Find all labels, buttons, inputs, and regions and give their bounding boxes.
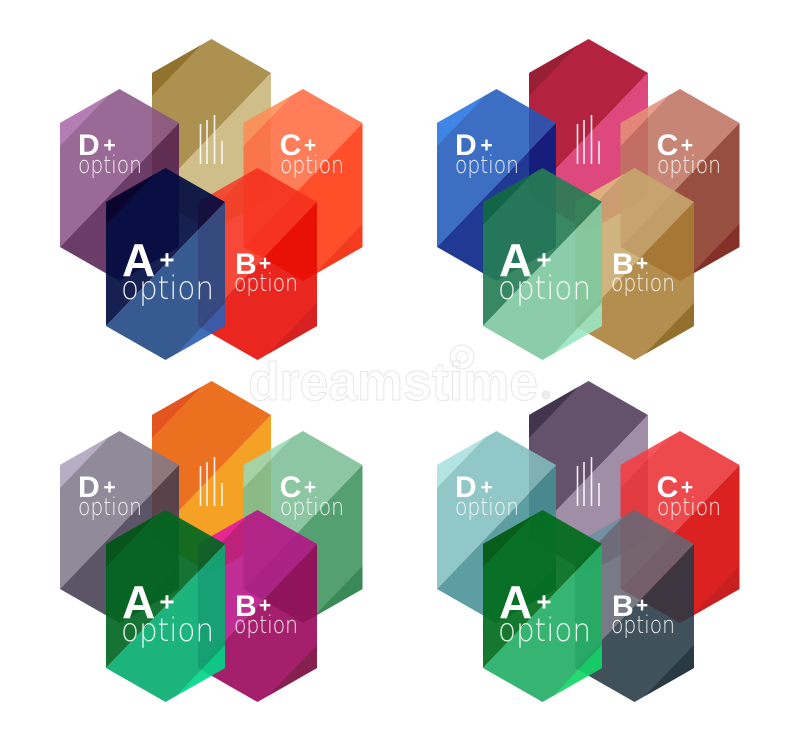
hexagon: top icon tile, tan <box>152 39 271 231</box>
label: A+ option: option <box>498 611 591 649</box>
label: B+ option: + <box>259 252 271 275</box>
hexagon: option B, slate <box>575 510 694 702</box>
label: C+ option: option <box>657 493 721 521</box>
label: D+ option: D <box>78 129 100 162</box>
label: D+ option: D <box>455 471 477 504</box>
label: C+ option: + <box>681 476 693 499</box>
label: B+ option: B <box>612 248 634 281</box>
label: D+ option: D <box>78 471 100 504</box>
label: A+ option: A <box>499 234 532 286</box>
label: D+ option: + <box>103 476 116 499</box>
hexagon: option C, coral <box>244 89 362 281</box>
label: B+ option <box>234 590 298 639</box>
label: A+ option: option <box>121 269 214 307</box>
label: C+ option: C <box>280 471 301 504</box>
panel: plum teal red hexagon set <box>437 381 740 702</box>
label: C+ option: C <box>280 129 301 162</box>
label: A+ option: + <box>536 587 552 617</box>
icon: bars <box>200 457 222 506</box>
label: B+ option <box>611 248 675 297</box>
hexagon: option D, pale teal <box>437 431 556 623</box>
label: C+ option <box>657 471 721 521</box>
label: C+ option: + <box>304 476 316 499</box>
label: B+ option: option <box>611 611 675 639</box>
panel: orange magenta green hexagon set <box>60 381 362 702</box>
label: A+ option: option <box>121 611 214 649</box>
label: A+ option: + <box>536 245 552 275</box>
hexagon: option D, grey violet <box>60 431 179 623</box>
label: A+ option: A <box>122 234 155 286</box>
label: C+ option: option <box>280 151 344 179</box>
label: B+ option: option <box>234 269 298 297</box>
panel: blue red green hexagon set <box>437 39 740 360</box>
label: D+ option: option <box>455 493 519 521</box>
label: A+ option <box>121 234 214 307</box>
label: A+ option: + <box>159 245 175 275</box>
label: D+ option: D <box>455 129 477 162</box>
panel: warm hexagon set <box>60 39 362 360</box>
label: D+ option: option <box>455 151 519 179</box>
label: C+ option: option <box>280 493 344 521</box>
label: C+ option: option <box>657 151 721 179</box>
label: A+ option: A <box>122 576 155 628</box>
label: B+ option <box>611 590 675 639</box>
label: C+ option <box>280 129 344 179</box>
hexagon: option A, mint <box>483 168 602 360</box>
label: D+ option <box>455 471 519 521</box>
label: D+ option: + <box>480 134 493 157</box>
hexagon: top icon tile, crimson <box>529 39 648 231</box>
label: B+ option: + <box>636 594 648 617</box>
label: B+ option: option <box>234 611 298 639</box>
label: D+ option: option <box>78 493 142 521</box>
label: B+ option: option <box>611 269 675 297</box>
label: C+ option: C <box>657 471 678 504</box>
label: B+ option <box>234 248 298 297</box>
label: B+ option: B <box>612 590 634 623</box>
icon: bars <box>578 457 599 506</box>
icon: bars <box>578 115 599 164</box>
label: B+ option: + <box>636 252 648 275</box>
hexagon: option D, blue <box>437 89 556 281</box>
label: B+ option: B <box>235 248 257 281</box>
hexagon: option B, magenta <box>198 510 317 702</box>
label: C+ option: + <box>681 134 693 157</box>
label: D+ option: + <box>480 476 493 499</box>
label: D+ option <box>78 129 142 179</box>
label: A+ option: + <box>159 587 175 617</box>
label: C+ option <box>280 471 344 521</box>
hexagon: option A, emerald <box>106 510 225 702</box>
hexagon: option C, sage <box>244 431 362 623</box>
label: B+ option: B <box>235 590 257 623</box>
hexagon: option A, green <box>483 510 602 702</box>
label: C+ option <box>657 129 721 179</box>
label: D+ option <box>455 129 519 179</box>
watermark: dreamstime <box>248 352 538 412</box>
hexagon: top icon tile, orange <box>152 381 271 573</box>
label: A+ option <box>121 576 214 649</box>
label: A+ option <box>498 576 591 649</box>
hexagon: top icon tile, plum <box>529 381 648 573</box>
hexagon: option B, red <box>198 168 317 360</box>
icon: bars <box>200 115 222 164</box>
label: D+ option: option <box>78 151 142 179</box>
hexagon: option C, dusty brown <box>620 89 740 281</box>
label: B+ option: + <box>259 594 271 617</box>
label: C+ option: C <box>657 129 678 162</box>
label: D+ option <box>78 471 142 521</box>
hexagon: option C, red <box>620 431 740 623</box>
hexagon: option B, sand <box>575 168 694 360</box>
hexagon: option D, purple <box>60 89 179 281</box>
label: C+ option: + <box>304 134 316 157</box>
label: D+ option: + <box>103 134 116 157</box>
label: A+ option: option <box>498 269 591 307</box>
hexagon: option A, navy <box>106 168 225 360</box>
label: A+ option: A <box>499 576 532 628</box>
label: A+ option <box>498 234 591 307</box>
